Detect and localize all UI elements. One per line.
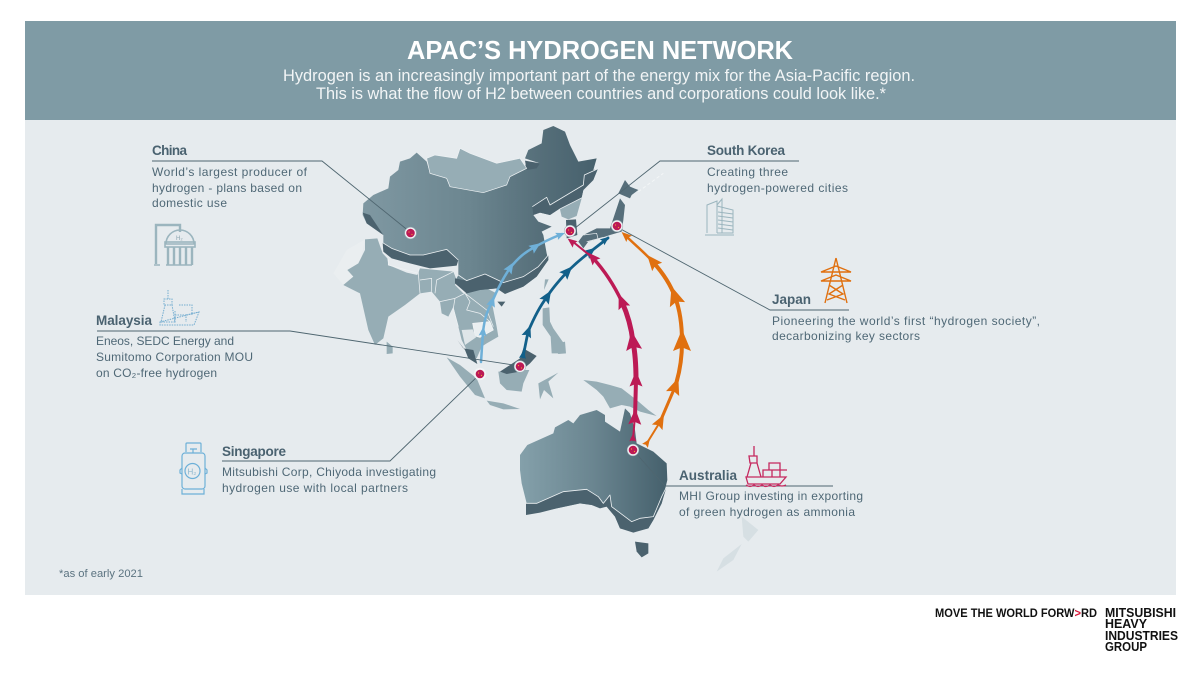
Australia southern band bbox=[526, 487, 667, 533]
map panel background bbox=[25, 120, 1176, 595]
callout: Malaysia bbox=[96, 313, 253, 380]
marker: Singapore bbox=[474, 368, 486, 380]
callout: Malaysia: Sumitomo Corporation MOU bbox=[96, 350, 253, 364]
icon: office towers bbox=[705, 199, 734, 235]
Kuril islands bbox=[638, 173, 663, 192]
Honshu and southern islands bbox=[578, 198, 625, 248]
callout: China: World’s largest producer of bbox=[152, 165, 308, 179]
map: South Asia and South-East Asia bbox=[333, 238, 498, 358]
flow arrow: crimson, Australia to South Korea bbox=[565, 235, 642, 442]
Papua New Guinea bbox=[583, 380, 657, 416]
footer logo: MITSUBISHI bbox=[1105, 606, 1176, 620]
leader line: China bbox=[152, 161, 410, 232]
China northeast dark band bbox=[525, 161, 597, 215]
subtitle: This is what the flow of H2 between countries and corporations could look like.* bbox=[316, 85, 887, 103]
callout: Singapore: Mitsubishi Corp, Chiyoda investigating bbox=[222, 465, 436, 479]
Australia southern line bbox=[526, 487, 667, 522]
India and South-East Asia landmass bbox=[343, 238, 498, 358]
leader line: South Korea bbox=[570, 161, 799, 232]
China southern dark band bbox=[363, 213, 548, 294]
leader line: Japan bbox=[617, 227, 849, 310]
leader line: Australia bbox=[633, 450, 833, 486]
Sri Lanka bbox=[387, 342, 393, 354]
Hainan bbox=[497, 302, 505, 307]
Borneo bbox=[498, 370, 529, 392]
callout: Australia: of green hydrogen as ammonia bbox=[679, 505, 855, 519]
marker: South Korea bbox=[564, 225, 576, 237]
callout: Malaysia: Malaysia bbox=[96, 313, 152, 328]
marker: Japan bbox=[611, 220, 623, 232]
footer logo: GROUP bbox=[1105, 640, 1147, 654]
callout: South Korea: South Korea bbox=[707, 143, 785, 158]
callout: South Korea bbox=[707, 143, 848, 195]
footer logo bbox=[1105, 606, 1178, 654]
callout: Japan bbox=[772, 292, 1040, 343]
callout: Singapore: hydrogen use with local partners bbox=[222, 481, 408, 495]
callout: Australia bbox=[679, 468, 863, 519]
callout: China: domestic use bbox=[152, 196, 227, 210]
title: APAC’S HYDROGEN NETWORK bbox=[407, 35, 793, 65]
callout: China bbox=[152, 143, 308, 210]
callout: Japan: Japan bbox=[772, 292, 811, 307]
icon: crimson ship bbox=[746, 446, 787, 486]
callout: Australia: Australia bbox=[679, 468, 737, 483]
leader line: Singapore bbox=[222, 374, 480, 461]
leader line: Malaysia bbox=[97, 331, 520, 366]
North Korea bbox=[560, 198, 582, 219]
faint western land bbox=[333, 239, 365, 285]
callout: Japan: Pioneering the world’s first “hydrogen society”, bbox=[772, 314, 1040, 328]
callout: South Korea: hydrogen-powered cities bbox=[707, 181, 848, 195]
icon: pylon bbox=[821, 258, 851, 303]
icon: hydrogen cylinder bbox=[180, 443, 207, 494]
China bbox=[363, 126, 598, 293]
callout: Singapore: Singapore bbox=[222, 444, 286, 459]
Australia bbox=[520, 408, 667, 532]
callout: South Korea: Creating three bbox=[707, 165, 788, 179]
map: Indonesia and Oceania bbox=[447, 340, 758, 572]
marker: Australia bbox=[627, 444, 639, 456]
flow arrow: orange, Australia to Japan bbox=[619, 229, 691, 448]
Japanese islands outline bbox=[583, 233, 603, 242]
Taiwan bbox=[544, 279, 549, 290]
footer logo: INDUSTRIES bbox=[1105, 629, 1178, 643]
subtitle bbox=[283, 67, 915, 103]
header banner bbox=[25, 21, 1176, 120]
callout: Singapore bbox=[222, 444, 436, 495]
subtitle: Hydrogen is an increasingly important part of the energy mix for the Asia-Pacific region. bbox=[283, 67, 915, 85]
icon: hydrogen storage tank: H₂ bbox=[176, 236, 183, 242]
footer slogan: MOVE THE WORLD FORW>RD bbox=[935, 606, 1097, 620]
country borders bbox=[388, 259, 493, 327]
Mongolia bbox=[427, 148, 527, 193]
map: China and neighbours bbox=[363, 126, 663, 353]
marker: Malaysia bbox=[514, 361, 526, 372]
footer logo: HEAVY bbox=[1105, 617, 1148, 631]
flow arrow: light blue, Singapore to South Korea bbox=[479, 230, 566, 362]
callout: Japan: decarbonizing key sectors bbox=[772, 329, 920, 343]
Malay peninsula bbox=[457, 340, 477, 364]
Philippines bbox=[543, 307, 565, 353]
Hokkaido bbox=[618, 180, 638, 198]
callout: Australia: MHI Group investing in exporting bbox=[679, 489, 863, 503]
South Korea bbox=[566, 219, 577, 238]
marker: China bbox=[405, 227, 416, 239]
callout: China: hydrogen - plans based on bbox=[152, 181, 302, 195]
icon: hydrogen storage tank bbox=[154, 225, 195, 265]
Sabah and Sarawak bbox=[500, 348, 537, 374]
Java bbox=[487, 401, 520, 409]
flow arrow: dark blue, Malaysia to Japan bbox=[519, 234, 611, 359]
Sumatra bbox=[447, 357, 485, 398]
Mindanao fragment bbox=[552, 342, 566, 354]
footnote: *as of early 2021 bbox=[59, 568, 143, 580]
Tasmania bbox=[635, 542, 648, 557]
China internal lines bbox=[383, 169, 597, 283]
Sulawesi bbox=[538, 373, 558, 399]
New Zealand bbox=[717, 517, 758, 572]
icon: dotted ship bbox=[160, 290, 199, 325]
Thailand south bbox=[462, 329, 476, 345]
callout: China: China bbox=[152, 143, 187, 158]
Cambodia bbox=[473, 322, 493, 337]
callout: Malaysia: on CO₂-free hydrogen bbox=[96, 366, 217, 380]
icon: hydrogen cylinder: H₂ bbox=[188, 468, 196, 476]
callout: Malaysia: Eneos, SEDC Energy and bbox=[96, 334, 234, 348]
